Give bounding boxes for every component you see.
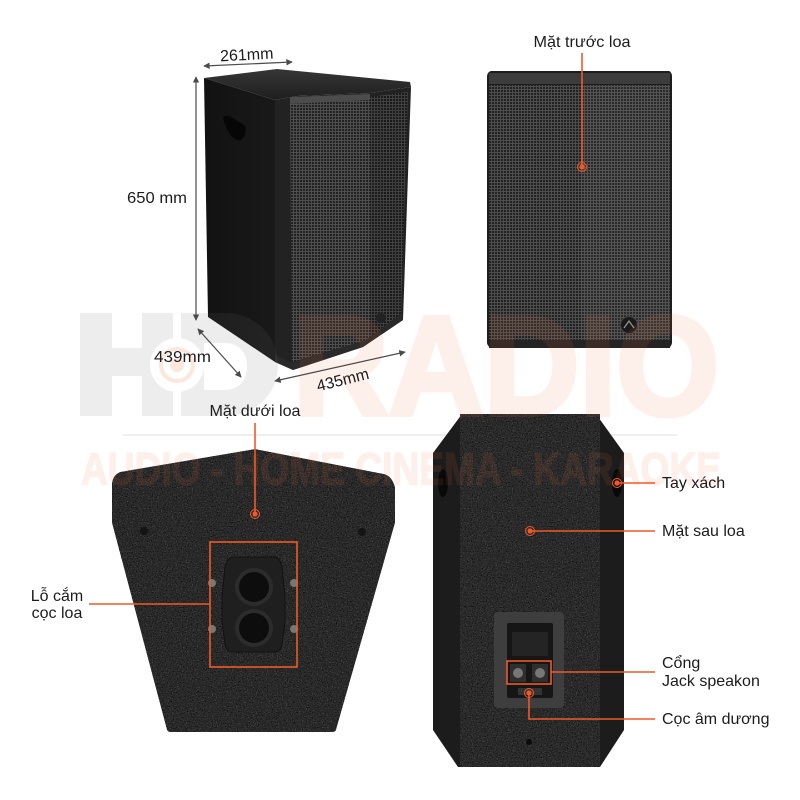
callout: pole socket: cọc loa bbox=[32, 605, 82, 622]
dimension: depth 439mm bbox=[154, 329, 241, 377]
watermark HD letters bbox=[80, 313, 278, 416]
speaker: front view bbox=[487, 71, 672, 348]
dimension: depth 439mm: 439mm bbox=[154, 349, 211, 366]
callout: bottom face bbox=[210, 403, 301, 518]
callout: handle: Tay xách bbox=[662, 475, 725, 492]
dimension: width 261mm: 261mm bbox=[220, 46, 274, 65]
callout: binding posts: Cọc âm dương bbox=[662, 711, 769, 728]
callout: binding posts bbox=[524, 688, 769, 728]
callout: speakon jack: Jack speakon bbox=[662, 673, 760, 690]
callout: speakon jack bbox=[507, 654, 760, 690]
callout: handle bbox=[612, 475, 725, 492]
watermark target icon bbox=[150, 338, 204, 392]
background divider line bbox=[123, 434, 677, 436]
watermark: HD RADIO logo bbox=[80, 286, 721, 494]
connector plate bbox=[494, 612, 564, 708]
callout: rear face bbox=[526, 523, 745, 540]
dimension: height 650 mm: 650 mm bbox=[127, 190, 187, 207]
speaker: rear view bbox=[433, 414, 624, 767]
callout: bottom face: Mặt dưới loa bbox=[210, 403, 301, 420]
dimension: 435mm bbox=[275, 352, 405, 395]
callout: pole socket bbox=[31, 542, 297, 667]
callout: front face bbox=[534, 34, 631, 172]
callout: speakon jack: Cổng bbox=[662, 654, 700, 672]
callout: pole socket: Lỗ cắm bbox=[31, 586, 83, 605]
dimension: width 261mm bbox=[204, 46, 292, 66]
callout: rear face: Mặt sau loa bbox=[662, 523, 745, 540]
speaker: bottom view bbox=[112, 449, 395, 732]
dimension: 435mm: 435mm bbox=[315, 366, 371, 395]
carrying handles bbox=[438, 469, 622, 497]
speaker: perspective view bbox=[204, 69, 411, 370]
watermark RADIO: RADIO bbox=[293, 286, 719, 444]
callout: front face: Mặt trước loa bbox=[534, 34, 631, 51]
